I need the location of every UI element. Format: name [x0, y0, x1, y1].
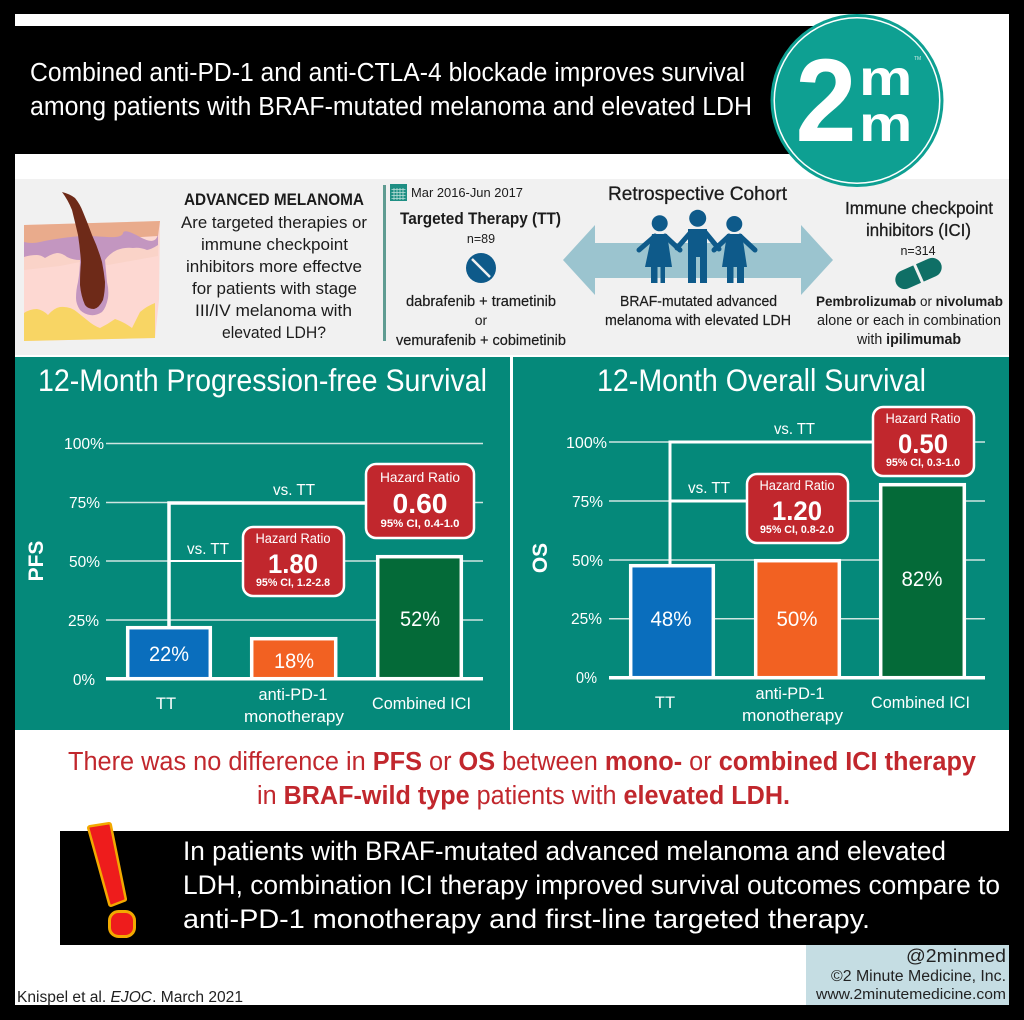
text block: advanced melanoma question: inhibitors more effectve [186, 257, 362, 276]
bar: TT 22%: 22% [149, 643, 189, 666]
bar: TT 48%: 48% [650, 608, 692, 631]
title: Combined anti-PD-1 and anti-CTLA-4 blockade improves survival [30, 59, 745, 87]
bar: anti-PD-1 18% [252, 639, 336, 679]
heading: 12-Month Progression-free Survival [38, 362, 487, 398]
text block: immune checkpoint inhibitor arm: n=314 [900, 244, 936, 258]
y axis ticks: 25% [571, 611, 602, 628]
callout: hazard ratio 1.80: 1.80 [268, 549, 318, 579]
panel: 12-month overall survival [513, 357, 1009, 730]
text block: conclusion: anti-PD-1 monotherapy and first-line targeted therapy. [183, 904, 870, 934]
title: among patients with BRAF-mutated melanoma and elevated LDH [30, 93, 752, 121]
logo: 2 minute medicine: 2 [796, 35, 857, 167]
text block: advanced melanoma question: for patients with stage [192, 279, 357, 298]
grid lines [609, 442, 985, 619]
text block: immune checkpoint inhibitor arm [816, 198, 1003, 348]
y axis ticks [64, 436, 104, 689]
heading: 12-Month Overall Survival [597, 362, 926, 398]
citation: Knispel et al. EJOC. March 2021 [17, 989, 243, 1006]
comparison label: vs. TT [273, 482, 315, 499]
callout: hazard ratio 1.80: 95% CI, 1.2-2.8 [256, 577, 330, 589]
y axis ticks [566, 435, 607, 687]
panel: study design [15, 179, 1009, 355]
callout: hazard ratio 0.50 [873, 407, 974, 476]
bar: anti-PD-1 50%: 50% [776, 608, 818, 631]
logo: 2 minute medicine: TM [914, 56, 921, 62]
callout: hazard ratio 0.50: Hazard Ratio [886, 411, 960, 426]
grid lines [106, 444, 483, 620]
y axis ticks: 0% [73, 672, 95, 689]
comparison brackets [169, 503, 368, 626]
heading: retrospective cohort: Retrospective Cohort [608, 183, 788, 205]
footer credit box [806, 945, 1009, 1005]
callout: hazard ratio 1.80: Hazard Ratio [256, 531, 330, 546]
text block: advanced melanoma question: Are targeted therapies or [181, 213, 367, 232]
comparison label: vs. TT [187, 541, 229, 558]
text block: BRAF-wild type finding: in BRAF-wild type patients with elevated LDH. [257, 782, 790, 810]
icon: tablet [466, 253, 496, 283]
text block: conclusion [183, 836, 1000, 934]
bar: anti-PD-1 50% [756, 561, 839, 678]
y axis ticks: 50% [69, 554, 100, 571]
callout: hazard ratio 0.60 [366, 464, 474, 538]
text block: targeted therapy arm: dabrafenib + trametinib [406, 294, 556, 310]
icon: capsule [891, 253, 946, 294]
text: study dates: Mar 2016-Jun 2017 [411, 185, 523, 200]
icon: calendar [390, 184, 407, 201]
callout: hazard ratio 0.50: 95% CI, 0.3-1.0 [886, 457, 960, 469]
bar: anti-PD-1 18%: 18% [274, 650, 314, 673]
y axis ticks: 75% [572, 494, 603, 511]
x axis labels: TT [655, 694, 675, 712]
footer credit box: @2minmed [906, 946, 1006, 966]
text block: advanced melanoma question: immune checkpoint [201, 235, 348, 254]
text: population: BRAF-mutated advanced [620, 294, 777, 310]
x axis labels: Combined ICI [372, 695, 471, 713]
y axis ticks: 100% [566, 435, 607, 452]
conclusion banner [60, 831, 1009, 945]
callout: hazard ratio 1.80 [243, 527, 344, 596]
icon: exclamation mark [90, 825, 134, 936]
title [30, 59, 752, 121]
bar: TT 48% [631, 566, 713, 678]
x axis [609, 676, 985, 680]
y axis label: PFS [25, 541, 48, 581]
callout: hazard ratio 1.20: Hazard Ratio [760, 478, 834, 493]
text: population: melanoma with elevated LDH [605, 313, 791, 329]
bar: combined ICI 52% [378, 557, 461, 679]
y axis ticks: 50% [572, 553, 603, 570]
bar: combined ICI 82% [881, 485, 964, 678]
footer credit box: ©2 Minute Medicine, Inc. [831, 968, 1006, 985]
text block: immune checkpoint inhibitor arm: with ipilimumab [856, 332, 961, 348]
text block: targeted therapy arm [396, 209, 566, 349]
text block: targeted therapy arm: or [475, 312, 488, 328]
callout: hazard ratio 1.20 [747, 474, 848, 543]
text block: BRAF-wild type finding: There was no difference in PFS or OS between mono- or combined ICI therapy [68, 748, 977, 776]
y axis ticks: 0% [576, 670, 597, 687]
x axis labels: monotherapy [244, 708, 345, 726]
logo: 2 minute medicine [770, 14, 944, 187]
callout: hazard ratio 1.20: 1.20 [772, 496, 822, 526]
x axis labels [655, 685, 970, 725]
x axis labels: Combined ICI [871, 694, 970, 712]
icon: skin and hair follicle [24, 192, 160, 341]
panel: 12-month progression-free survival [15, 357, 510, 730]
text block: targeted therapy arm: n=89 [467, 232, 495, 246]
comparison brackets [670, 442, 875, 564]
y axis ticks: 75% [69, 495, 100, 512]
x axis labels: anti-PD-1 [258, 686, 328, 704]
text block: advanced melanoma question: III/IV melanoma with [195, 301, 352, 320]
logo: 2 minute medicine: m [859, 50, 912, 106]
callout: hazard ratio 0.50: 0.50 [898, 429, 948, 459]
comparison label: vs. TT [774, 421, 815, 438]
callout: hazard ratio 0.60: Hazard Ratio [380, 469, 460, 485]
icon: people holding hands [639, 210, 755, 283]
callout: hazard ratio 0.60: 0.60 [392, 488, 448, 519]
footer credit box: www.2minutemedicine.com [815, 986, 1006, 1003]
bar: combined ICI 52%: 52% [400, 608, 440, 631]
text block: immune checkpoint inhibitor arm: alone or each in combination [817, 313, 1001, 329]
text: population [605, 294, 791, 329]
y axis ticks: 100% [64, 436, 104, 453]
callout: hazard ratio 1.20: 95% CI, 0.8-2.0 [760, 524, 834, 536]
divider bar [383, 185, 386, 341]
x axis labels [156, 686, 471, 726]
text block: targeted therapy arm: vemurafenib + cobimetinib [396, 333, 566, 349]
text block: conclusion: In patients with BRAF-mutated advanced melanoma and elevated [183, 836, 946, 866]
y axis label: OS [529, 543, 552, 573]
text block: targeted therapy arm: Targeted Therapy (TT) [400, 209, 561, 228]
x axis labels: anti-PD-1 [756, 685, 824, 703]
x axis labels: TT [156, 695, 176, 713]
y axis ticks: 25% [68, 613, 99, 630]
comparison label: vs. TT [688, 480, 730, 497]
x axis [106, 677, 483, 680]
callout: hazard ratio 0.60: 95% CI, 0.4-1.0 [380, 518, 460, 530]
text block: advanced melanoma question: elevated LDH? [222, 323, 326, 342]
text block: advanced melanoma question [181, 191, 367, 342]
arrow: double-headed [563, 225, 833, 295]
text block: conclusion: LDH, combination ICI therapy improved survival outcomes compare to [183, 870, 1000, 900]
logo: 2 minute medicine: m [859, 96, 912, 152]
header banner [15, 26, 845, 154]
text block: advanced melanoma question: ADVANCED MELANOMA [184, 191, 364, 209]
bar: combined ICI 82%: 82% [902, 568, 942, 591]
text block: BRAF-wild type finding [68, 748, 977, 810]
x axis labels: monotherapy [742, 707, 844, 725]
text block: immune checkpoint inhibitor arm: Immune checkpoint [845, 198, 993, 218]
text block: immune checkpoint inhibitor arm: inhibitors (ICI) [866, 220, 971, 240]
text block: immune checkpoint inhibitor arm: Pembrolizumab or nivolumab [816, 293, 1003, 309]
bar: TT 22% [128, 628, 210, 679]
